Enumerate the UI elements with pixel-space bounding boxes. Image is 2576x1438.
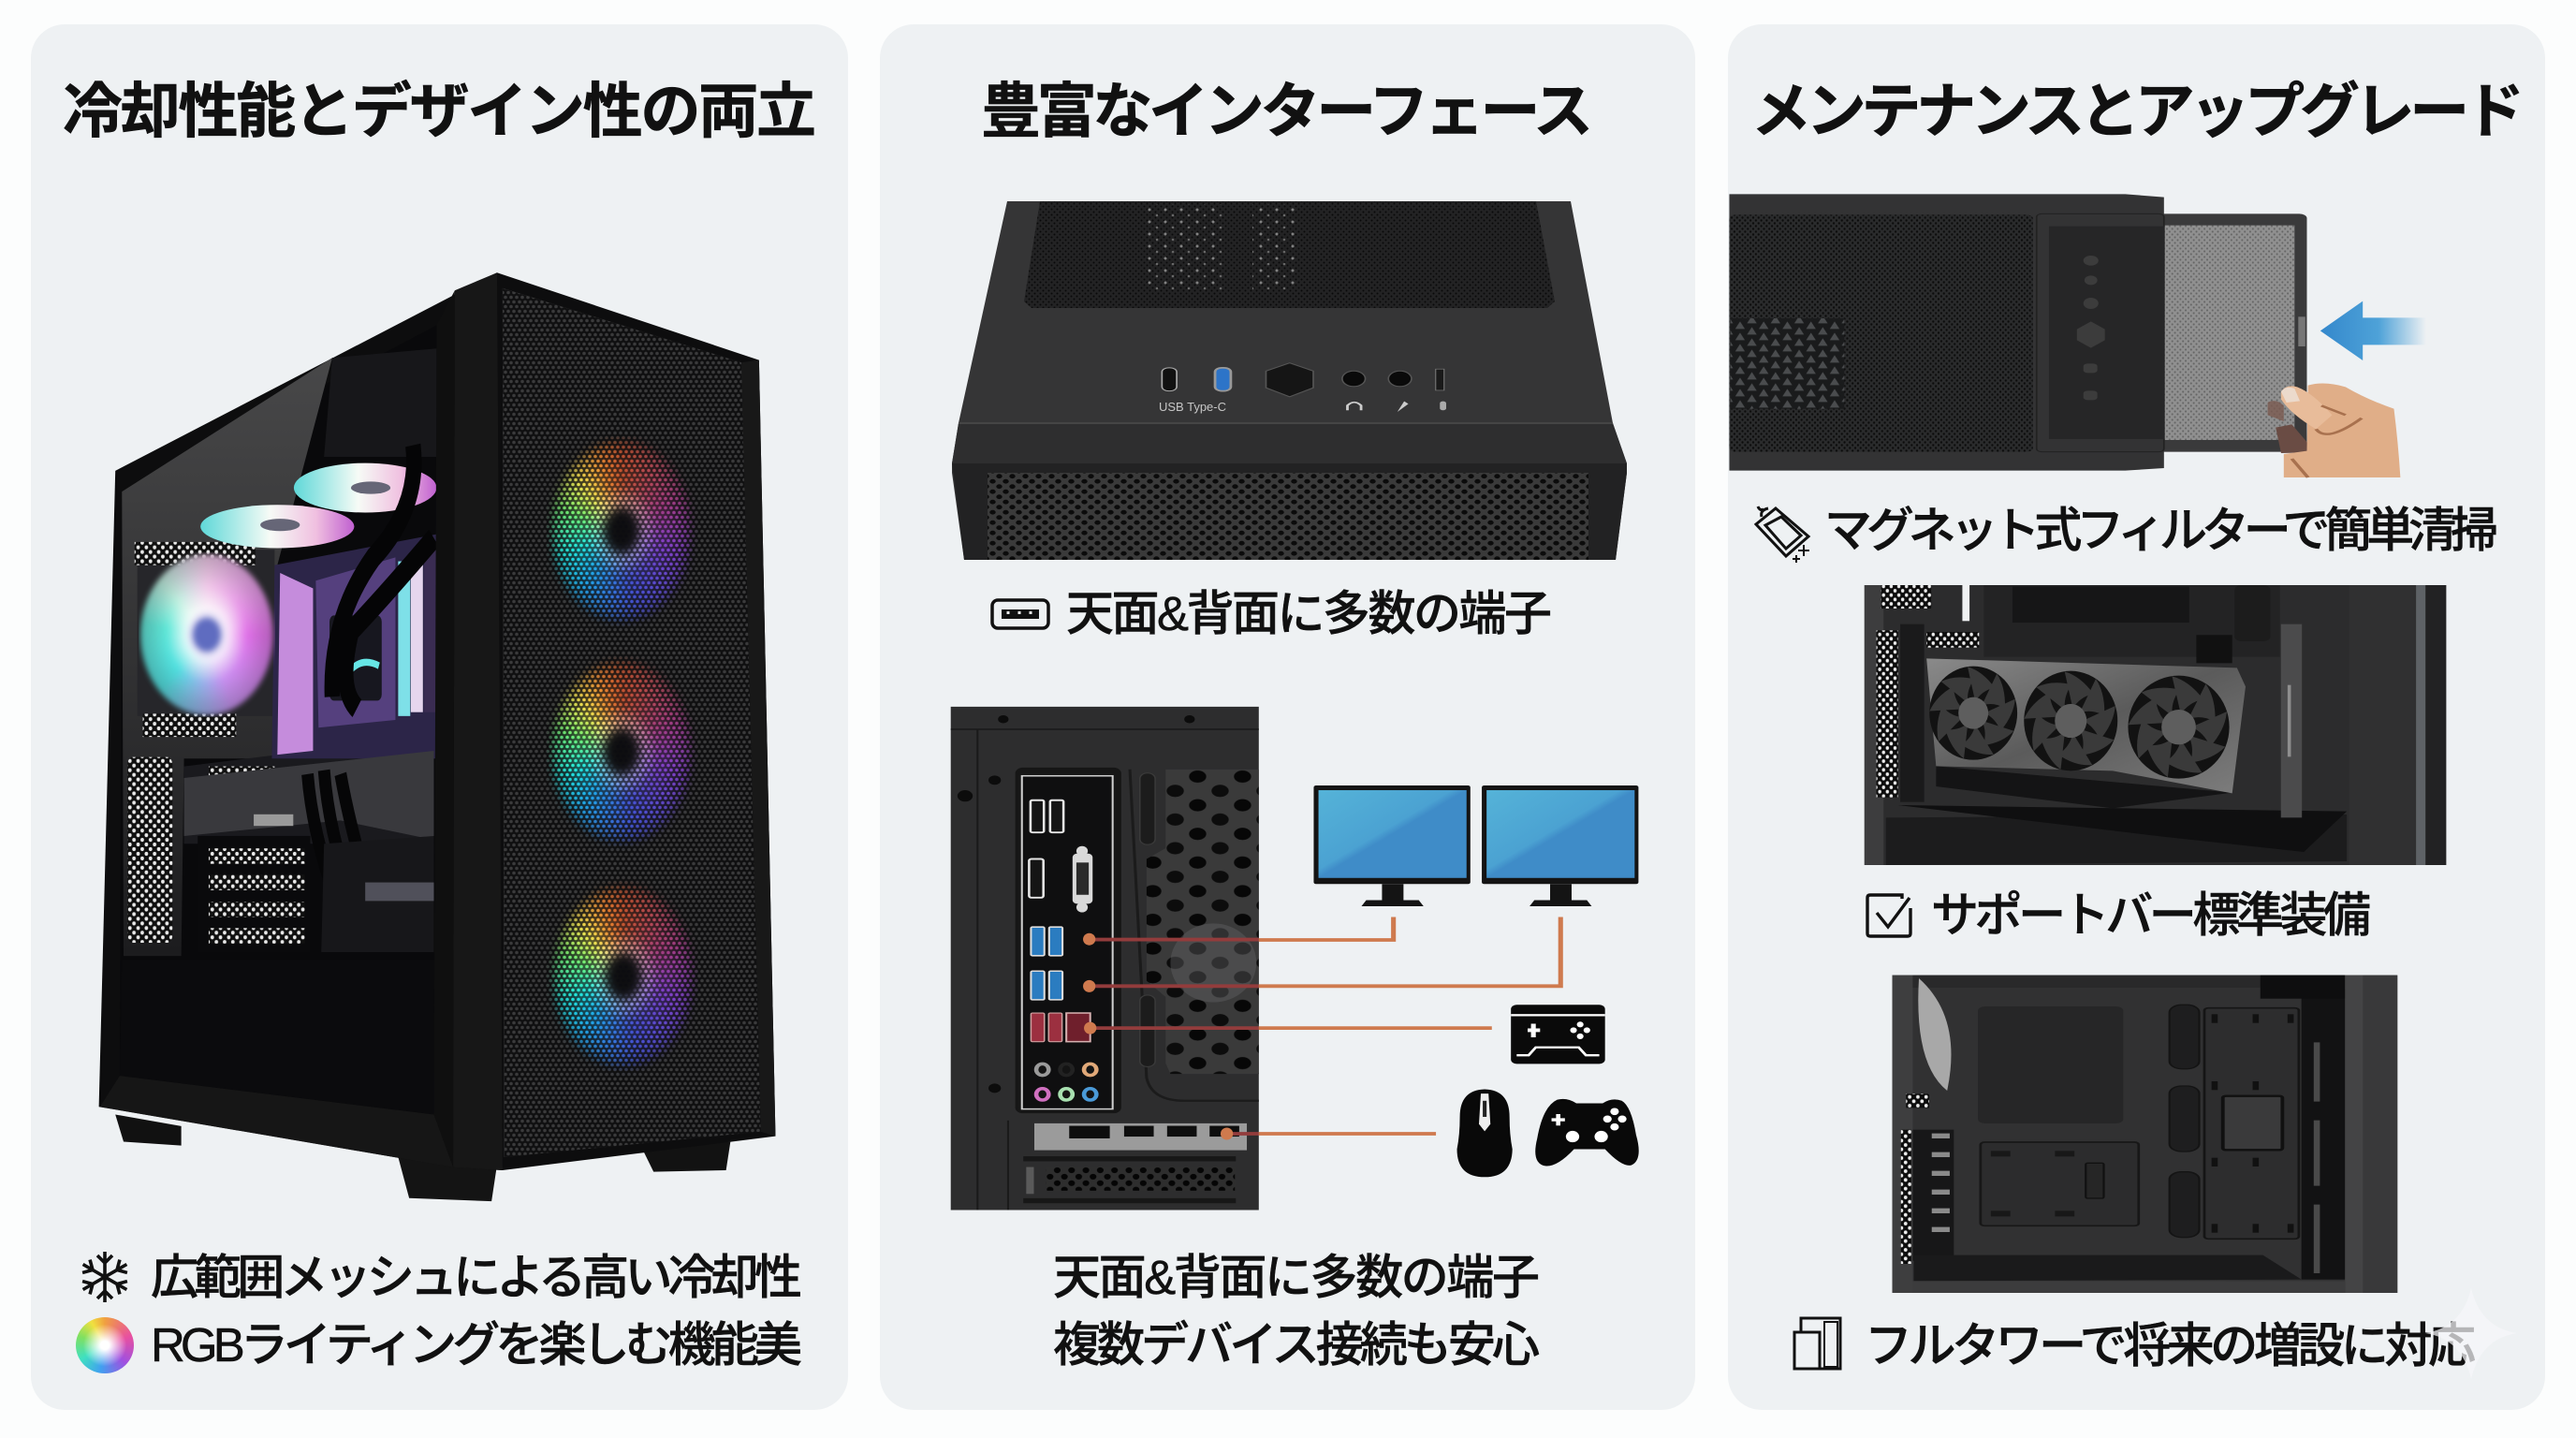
- caption: full tower expansion: フルタワーで将来の増設に対応: [1865, 1319, 2476, 1372]
- sparkle watermark: [2425, 1288, 2517, 1379]
- heading: interfaces: 豊富なインターフェース: [981, 78, 1593, 145]
- rear panel photo: [951, 707, 1259, 1210]
- panel: interfaces: [880, 24, 1695, 1410]
- heading: maintenance: メンテナンスとアップグレード: [1751, 78, 2525, 145]
- icon: snowflake: [80, 1252, 130, 1302]
- icon: RGB colour wheel: [75, 1316, 135, 1374]
- icon: monitor right: [1482, 785, 1638, 906]
- icon: tower cases: [1794, 1318, 1840, 1369]
- rear panel connection diagram: [951, 707, 1639, 1210]
- panel: cooling and design: [31, 24, 848, 1410]
- arrow: slide filter: [2320, 301, 2426, 360]
- hand: [2268, 384, 2400, 477]
- caption: ports and devices: 天面&背面に多数の端子: [1053, 1251, 1540, 1304]
- PC tower illustration: [99, 272, 775, 1201]
- GPU support bar photo: [1865, 585, 2446, 865]
- caption: ports and devices: [1053, 1251, 1540, 1372]
- front fans glow: [547, 436, 698, 1082]
- label: USB Type-C: USB Type-C: [1159, 400, 1226, 414]
- front fans light through mesh: [552, 442, 692, 1065]
- caption: magnetic filter: マグネット式フィルターで簡単清掃: [1824, 504, 2498, 557]
- icon: game console: [1511, 1005, 1605, 1064]
- caption: ports and devices: 複数デバイス接続も安心: [1053, 1318, 1540, 1372]
- icon: mouse: [1457, 1090, 1513, 1177]
- top I/O panel photo: [952, 201, 1627, 560]
- icon: filter cleaning: [1756, 506, 1809, 563]
- caption: many ports: 天面&背面に多数の端子: [1066, 587, 1552, 640]
- heading: cooling and design: 冷却性能とデザイン性の両立: [63, 78, 816, 145]
- case interior photo: [1893, 976, 2397, 1293]
- filter removal illustration: [1729, 194, 2426, 477]
- icon: monitor left: [1313, 785, 1471, 906]
- icon: checkbox: [1867, 895, 1910, 936]
- connection lines: [1083, 917, 1560, 1139]
- feature: mesh cooling: 広範囲メッシュによる高い冷却性: [151, 1251, 802, 1304]
- icon: USB port: [992, 600, 1048, 628]
- feature: RGB lighting: RGBライティングを楽しむ機能美: [151, 1318, 802, 1372]
- icon: gamepad: [1535, 1099, 1639, 1166]
- rear fan glow: [139, 552, 275, 717]
- panel: maintenance and upgrades: [1728, 24, 2545, 1410]
- caption: support bar: サポートバー標準装備: [1931, 888, 2371, 942]
